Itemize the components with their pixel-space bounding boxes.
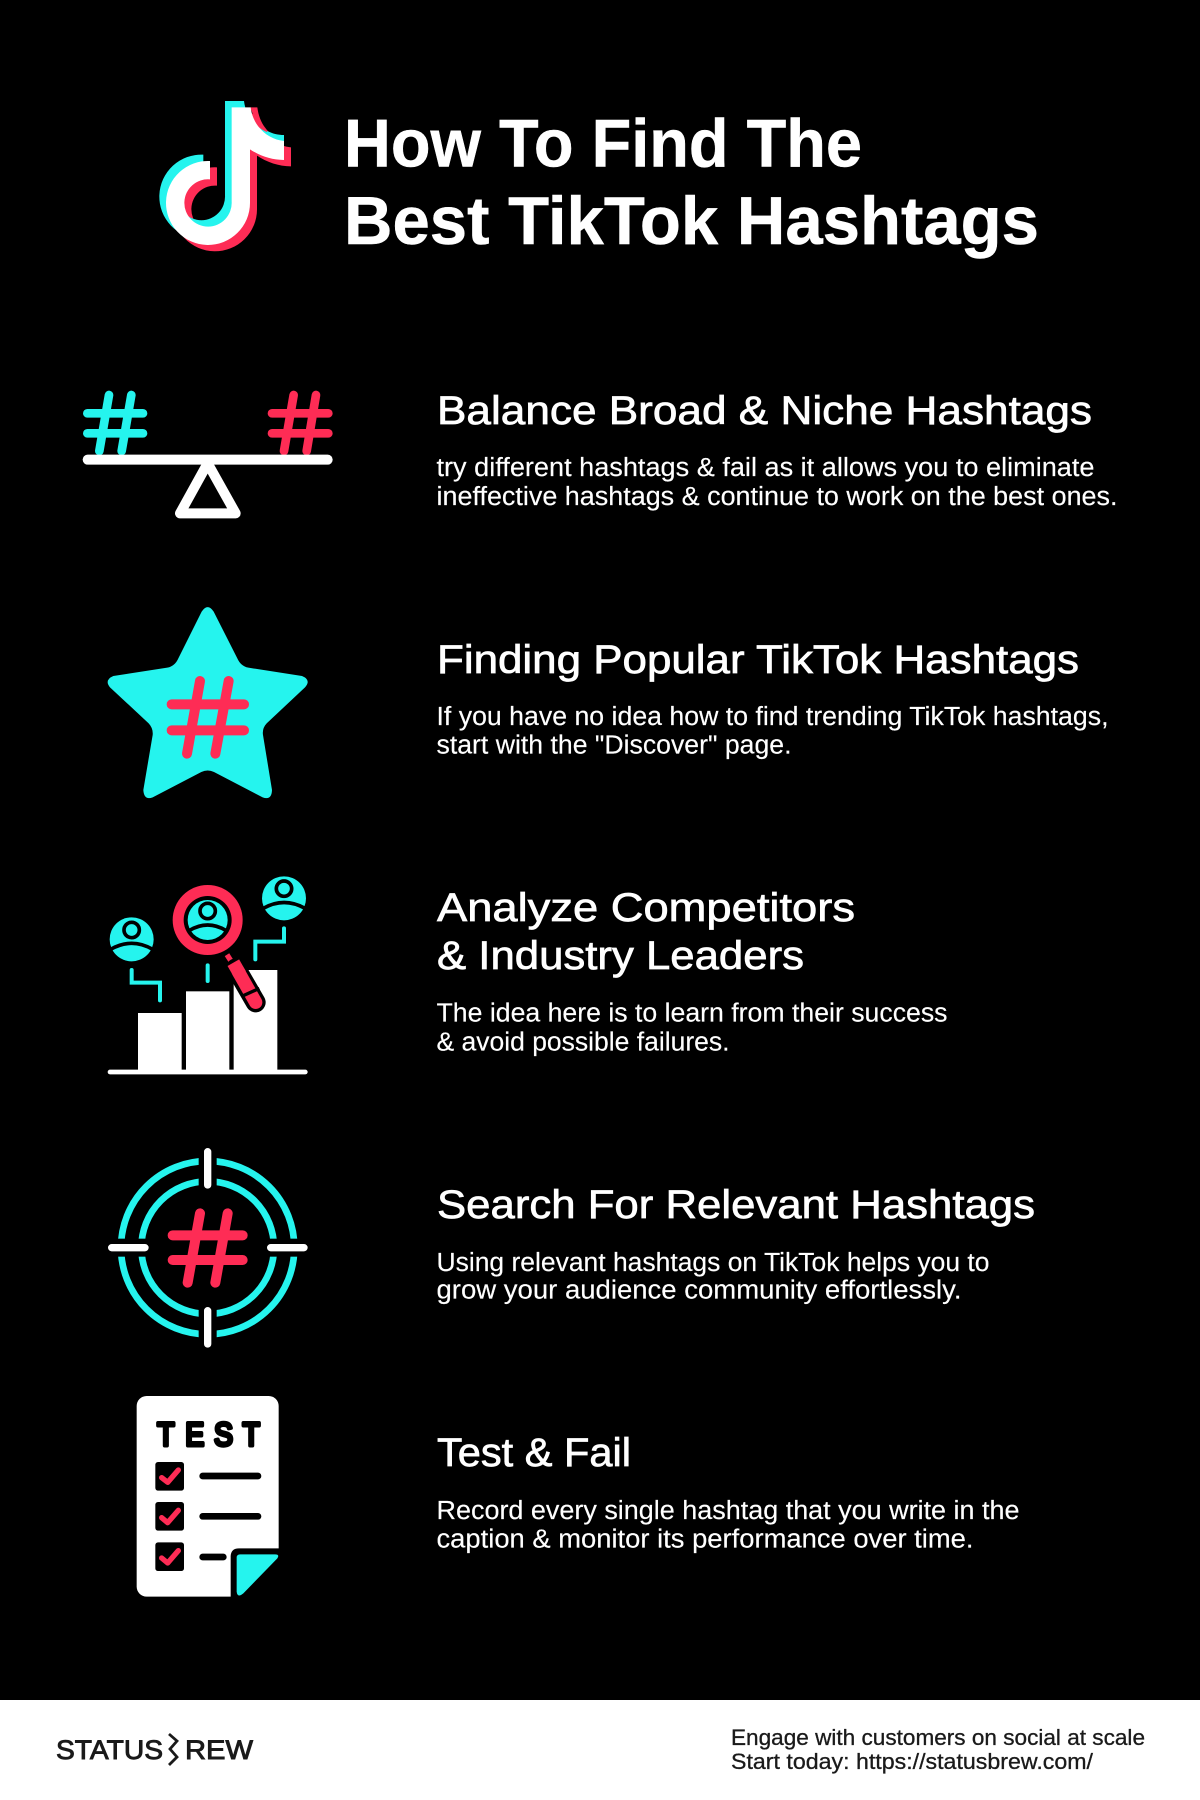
logo: Statusbrew <box>56 1734 254 1765</box>
title <box>344 106 1039 259</box>
text: footer call to action <box>731 1725 1145 1774</box>
text: test and fail description <box>436 1497 1020 1554</box>
text: balance description: try different hashtags & fail as it allows you to eliminate <box>436 454 1094 482</box>
icon: star with hashtag <box>108 607 308 798</box>
text: test and fail description: Record every single hashtag that you write in the <box>436 1497 1020 1525</box>
heading: competitors <box>437 886 855 978</box>
icon: test sheet: TEST <box>157 1418 260 1453</box>
text: competitors description: The idea here is to learn from their success <box>436 1000 948 1028</box>
text: competitors description: & avoid possible failures. <box>436 1028 730 1056</box>
heading: competitors: Analyze Competitors <box>437 886 855 930</box>
icon: competitors chart with magnifier <box>108 876 308 1074</box>
text: competitors description <box>436 1000 948 1056</box>
text: popular description: start with the "Discover" page. <box>436 732 792 760</box>
text: relevant description <box>436 1249 990 1304</box>
text: test and fail description: caption & monitor its performance over time. <box>436 1526 974 1554</box>
text: balance description <box>436 454 1118 511</box>
title: Best TikTok Hashtags <box>344 183 1039 259</box>
icon: TikTok logo <box>159 101 291 251</box>
text: relevant description: grow your audience community effortlessly. <box>436 1276 962 1304</box>
panel: footer <box>0 1700 1200 1800</box>
text: footer call to action: Start today: https://statusbrew.com/ <box>731 1749 1094 1774</box>
heading: popular: Finding Popular TikTok Hashtags <box>437 638 1079 682</box>
logo: Statusbrew: STATUS <box>56 1735 163 1765</box>
heading: balance: Balance Broad & Niche Hashtags <box>437 389 1092 433</box>
icon: seesaw with hashtags <box>87 395 328 513</box>
text: balance description: ineffective hashtags & continue to work on the best ones. <box>436 483 1118 511</box>
heading: competitors: & Industry Leaders <box>437 934 804 978</box>
logo: Statusbrew: REW <box>185 1735 254 1765</box>
text: relevant description: Using relevant hashtags on TikTok helps you to <box>436 1249 990 1277</box>
text: footer call to action: Engage with customers on social at scale <box>731 1725 1145 1750</box>
icon: test sheet <box>137 1396 280 1598</box>
text: popular description: If you have no idea how to find trending TikTok hashtags, <box>436 703 1108 731</box>
title: How To Find The <box>344 106 862 182</box>
text: popular description <box>436 703 1108 760</box>
icon: target with hashtag <box>112 1152 304 1344</box>
heading: relevant: Search For Relevant Hashtags <box>437 1183 1035 1227</box>
heading: test and fail: Test & Fail <box>437 1431 631 1475</box>
